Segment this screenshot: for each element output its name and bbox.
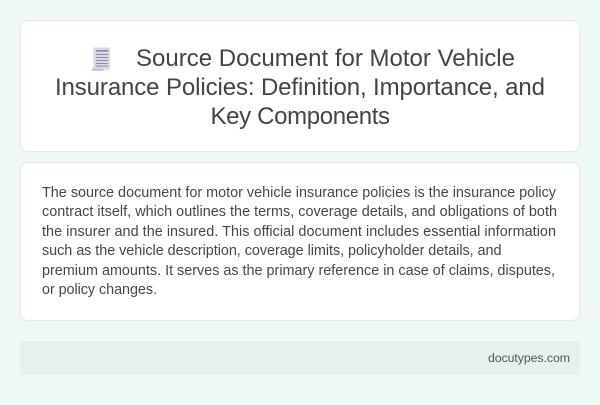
text: description line 3: the insurer and the insured. This official document includes essential information bbox=[42, 224, 556, 240]
text: description line 4: such as the vehicle description, coverage limits, policyholder details, and bbox=[42, 243, 502, 259]
heading: line 2: Insurance Policies: Definition, Importance, and bbox=[55, 74, 545, 101]
footer: site name: docutypes.com bbox=[488, 351, 570, 365]
icon: document bbox=[91, 48, 110, 71]
text: description line 2: contract itself, which outlines the terms, coverage details, and obligations of both bbox=[42, 204, 557, 220]
text: description line 6: or policy changes. bbox=[42, 282, 157, 298]
heading: line 1: Source Document for Motor Vehicle bbox=[136, 45, 515, 72]
heading: line 3: Key Components bbox=[210, 103, 390, 130]
text: description line 1: The source document for motor vehicle insurance policies is the insurance policy bbox=[42, 185, 557, 201]
text: description line 5: premium amounts. It serves as the primary reference in case of claims, disputes, bbox=[42, 263, 555, 279]
panel: title card bbox=[20, 20, 580, 152]
footer bar bbox=[20, 341, 580, 375]
panel: description card bbox=[20, 162, 580, 321]
